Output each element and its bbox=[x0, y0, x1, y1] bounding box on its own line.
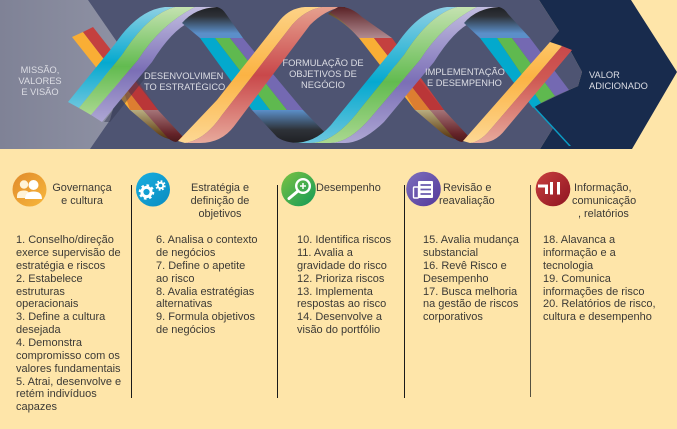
text column 1: desejada bbox=[16, 324, 62, 336]
text column 3: 13. Implementa bbox=[297, 286, 374, 298]
chevron: slate middle bbox=[80, 0, 582, 149]
cool strand: first descent bbox=[182, 7, 332, 143]
text column 4: substancial bbox=[423, 247, 478, 259]
text column 2: de negócios bbox=[156, 247, 216, 259]
heading: estratégia: definição de bbox=[191, 195, 249, 207]
text column 2: alternativas bbox=[156, 298, 213, 310]
cool strand: second rise bbox=[293, 7, 499, 143]
text column 3: respostas ao risco bbox=[297, 298, 386, 310]
banner label: desenvolvimento: DESENVOLVIMEN bbox=[144, 71, 223, 81]
text column 5: 19. Comunica bbox=[543, 273, 612, 285]
text column 1: operacionais bbox=[16, 298, 79, 310]
banner label: formulação: OBJETIVOS DE bbox=[289, 69, 357, 79]
heading: estratégia: objetivos bbox=[199, 208, 242, 220]
icon: magnifier bbox=[281, 172, 316, 206]
icon: bars bbox=[536, 172, 570, 206]
text column 2: de negócios bbox=[156, 324, 216, 336]
text column 1: compromisso com os bbox=[16, 350, 120, 362]
text column 5: informações de risco bbox=[543, 286, 644, 298]
text column 1: estruturas bbox=[16, 286, 65, 298]
text column 3: 12. Prioriza riscos bbox=[297, 273, 385, 285]
text column 4: corporativos bbox=[423, 311, 483, 323]
heading: governança: Governança bbox=[52, 182, 113, 194]
icon: document bbox=[406, 172, 441, 206]
text column 1: 1. Conselho/direção bbox=[16, 234, 114, 246]
text column 1: 3. Define a cultura bbox=[16, 311, 106, 323]
banner label: implementação: E DESEMPENHO bbox=[427, 78, 502, 88]
chevron: navy value bbox=[533, 0, 677, 149]
text column 1: valores fundamentais bbox=[16, 363, 121, 375]
banner label: implementação: IMPLEMENTAÇÃO bbox=[425, 67, 505, 77]
text column 1: 5. Atrai, desenvolve e bbox=[16, 376, 121, 388]
warm strand: first rise bbox=[178, 7, 342, 143]
text column 3: 14. Desenvolve a bbox=[297, 311, 383, 323]
text column 4: 17. Busca melhoria bbox=[423, 286, 518, 298]
text column 3: 11. Avalia a bbox=[297, 247, 354, 259]
text column 3: 10. Identifica riscos bbox=[297, 234, 392, 246]
warm strand: first descent bbox=[72, 27, 184, 142]
icon: people bbox=[12, 172, 46, 206]
text column 4: Desempenho bbox=[423, 273, 488, 285]
text column 5: tecnologia bbox=[543, 260, 594, 272]
cool strand: second descent bbox=[464, 7, 571, 146]
heading: informação: Informação, bbox=[574, 182, 632, 194]
banner label: formulação: FORMULAÇÃO DE bbox=[282, 58, 364, 68]
text column 1: retém indivíduos bbox=[16, 388, 97, 400]
text column 2: 9. Formula objetivos bbox=[156, 311, 256, 323]
heading: revisão: reavaliação bbox=[439, 195, 495, 207]
banner label: missão: VALORES bbox=[18, 76, 62, 86]
chevron: gray mission bbox=[0, 0, 126, 149]
text column 1: estratégia e riscos bbox=[16, 260, 106, 272]
text column 4: na gestão de riscos bbox=[423, 298, 519, 310]
warm strand: second rise bbox=[463, 42, 572, 143]
text column 2: 6. Analisa o contexto bbox=[156, 234, 258, 246]
cool strand: first rise bbox=[68, 7, 217, 122]
warm strand: second descent bbox=[328, 7, 470, 142]
heading: desempenho: Desempenho bbox=[316, 182, 381, 194]
text column 2: 7. Define o apetite bbox=[156, 260, 245, 272]
text column 5: informação e a bbox=[543, 247, 617, 259]
banner label: desenvolvimento: TO ESTRATÉGICO bbox=[144, 82, 225, 92]
column dividers bbox=[132, 185, 530, 398]
banner label: missão: E VISÃO bbox=[21, 87, 59, 97]
text column 2: 8. Avalia estratégias bbox=[156, 286, 255, 298]
heading: informação: comunicação bbox=[572, 195, 636, 207]
banner label: formulação: NEGÓCIO bbox=[301, 80, 345, 90]
text column 2: ao risco bbox=[156, 273, 195, 285]
text column 1: 2. Estabelece bbox=[16, 273, 83, 285]
heading: governança: e cultura bbox=[61, 195, 104, 207]
text column 1: exerce supervisão de bbox=[16, 247, 121, 259]
heading: informação: , relatórios bbox=[578, 208, 629, 220]
text column 3: visão do portfólio bbox=[297, 324, 380, 336]
text column 5: cultura e desempenho bbox=[543, 311, 652, 323]
shadow under first rising strand bbox=[104, 70, 150, 122]
text column 1: capazes bbox=[16, 401, 57, 413]
text column 5: 18. Alavanca a bbox=[543, 234, 616, 246]
banner label: valor: ADICIONADO bbox=[589, 81, 648, 91]
banner: chevron backgrounds bbox=[0, 0, 677, 149]
helix ribbon bbox=[68, 7, 572, 146]
text column 5: 20. Relatórios de risco, bbox=[543, 298, 656, 310]
text column 4: 16. Revê Risco e bbox=[423, 260, 507, 272]
heading: estratégia: Estratégia e bbox=[191, 182, 249, 194]
text column 4: 15. Avalia mudança bbox=[423, 234, 520, 246]
icon: gears bbox=[136, 172, 170, 206]
banner label: missão: MISSÃO, bbox=[21, 65, 59, 75]
heading: revisão: Revisão e bbox=[443, 182, 491, 194]
text column 3: gravidade do risco bbox=[297, 260, 387, 272]
text column 1: 4. Demonstra bbox=[16, 337, 83, 349]
banner label: valor: VALOR bbox=[589, 70, 620, 80]
